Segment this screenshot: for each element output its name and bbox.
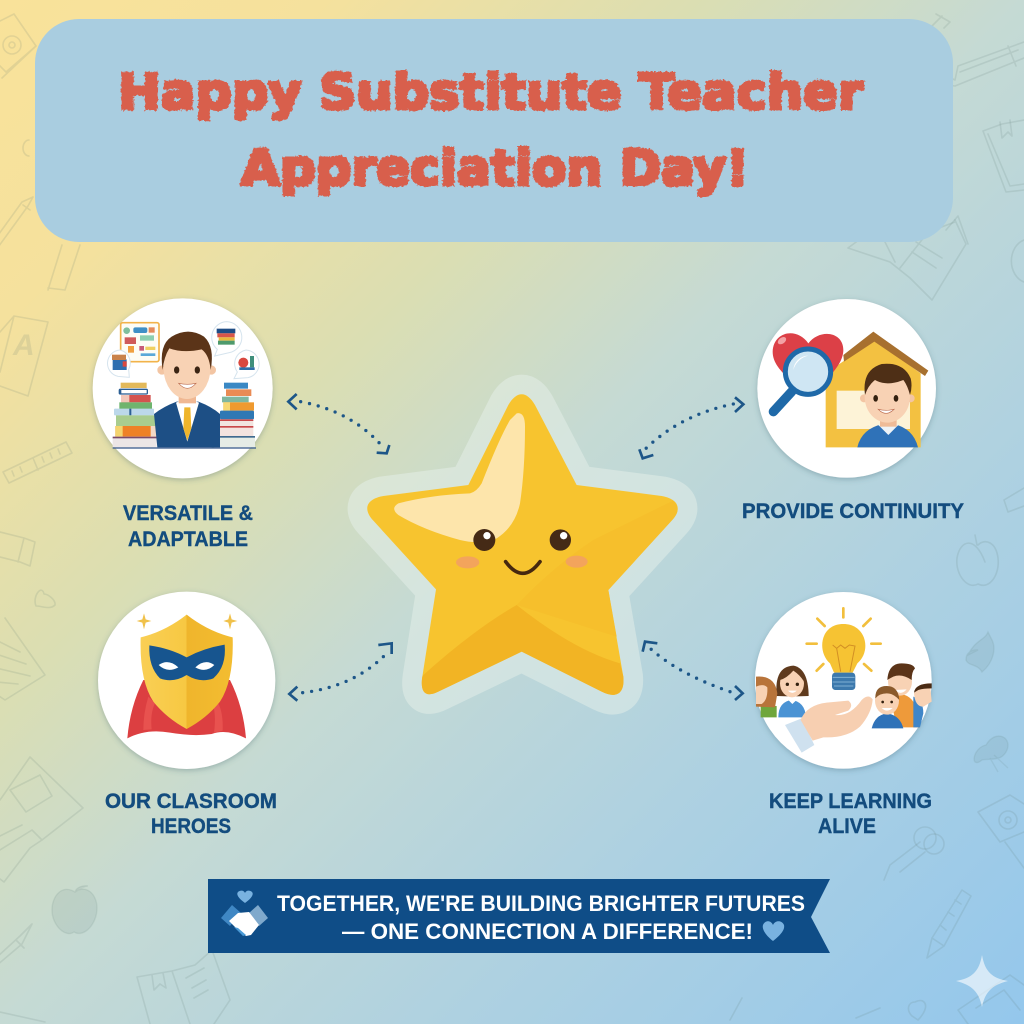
label: versatile and adaptable: VERSATILE & — [123, 502, 253, 525]
heart — [773, 333, 843, 397]
star right shade — [517, 501, 678, 637]
right children — [872, 663, 932, 728]
light bulb — [807, 608, 881, 690]
right books — [212, 383, 255, 447]
circle: teacher with books — [93, 298, 273, 478]
shield — [141, 615, 233, 729]
label: keep learning alive — [769, 790, 932, 838]
ribbon banner — [208, 879, 830, 953]
background doodles: A — [12, 329, 35, 362]
star halo — [367, 394, 678, 695]
label: versatile and adaptable: ADAPTABLE — [128, 528, 248, 551]
star lower shade — [422, 605, 624, 695]
speech bubbles — [108, 322, 259, 379]
label: our clasroom heroes: HEROES — [151, 815, 231, 838]
ribbon text — [277, 891, 805, 944]
label: our clasroom heroes — [105, 790, 277, 838]
star highlight — [394, 413, 525, 542]
sparkles — [137, 613, 237, 629]
sparkle watermark — [956, 955, 1008, 1007]
left children — [756, 666, 809, 717]
label: versatile and adaptable — [123, 502, 253, 551]
ribbon text: — ONE CONNECTION A DIFFERENCE! — [342, 919, 753, 944]
title text: Appreciation Day! — [241, 140, 749, 197]
circle: hero shield and cape — [98, 592, 275, 769]
panel: provide continuity — [742, 299, 964, 523]
star face — [456, 529, 588, 573]
title text: Happy Substitute Teacher — [118, 64, 864, 121]
left books — [113, 383, 159, 447]
panel: classroom heroes — [98, 592, 277, 838]
magnifier — [773, 349, 831, 412]
icon: handshake with heart — [221, 891, 268, 936]
arrow: learning to star — [643, 642, 743, 700]
central star mascot — [367, 394, 678, 695]
label: keep learning alive: ALIVE — [818, 815, 876, 838]
panel: versatile and adaptable — [93, 298, 273, 551]
arrow: continuity to star — [639, 397, 743, 458]
label: provide continuity: PROVIDE CONTINUITY — [742, 500, 964, 523]
circle: hand, bulb and children — [755, 592, 932, 769]
mask — [149, 645, 225, 680]
board — [121, 323, 159, 362]
panel: keep learning alive — [755, 592, 932, 838]
star body — [367, 394, 678, 695]
arrow: versatile to star — [288, 394, 389, 453]
ribbon text: TOGETHER, WE'RE BUILDING BRIGHTER FUTURES — [277, 891, 805, 916]
circle: heart, magnifier and house — [757, 299, 936, 478]
title panel — [35, 19, 953, 242]
person — [857, 364, 918, 447]
teacher — [154, 332, 220, 447]
background filled doodles — [52, 632, 1008, 934]
icon: blue heart — [763, 921, 784, 941]
house — [826, 332, 928, 447]
arrow: heroes to star — [289, 643, 392, 701]
title text — [118, 64, 864, 197]
label: our clasroom heroes: OUR CLASROOM — [105, 790, 277, 813]
hand — [785, 696, 873, 753]
label: keep learning alive: KEEP LEARNING — [769, 790, 932, 813]
cape — [127, 680, 246, 738]
